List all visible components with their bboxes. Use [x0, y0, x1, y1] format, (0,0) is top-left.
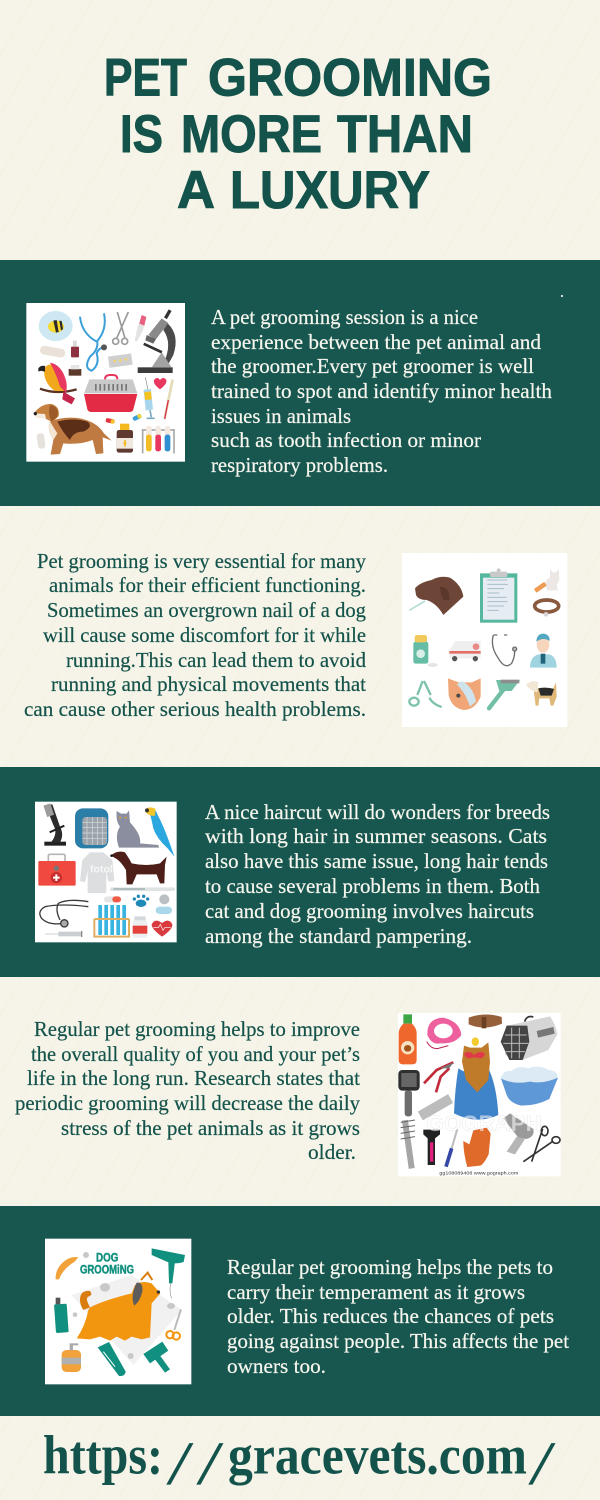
text: efficient functioning: will cause some discomfort for it while [43, 623, 366, 647]
panel: haircuts [0, 767, 600, 977]
text: efficient functioning: can cause other serious health problems. [24, 697, 366, 721]
icon: scissors [113, 312, 128, 344]
text: haircuts: among the standard pampering. [205, 924, 472, 948]
text: haircuts [205, 800, 550, 948]
icon: bandage [39, 345, 66, 358]
icon: syringe [45, 931, 82, 937]
panel: quality of life [15, 1013, 561, 1176]
text: quality of life: periodic grooming will decrease the daily [15, 1091, 360, 1115]
icon: dog with thermometer [409, 577, 463, 615]
text: quality of life: Regular pet grooming helps to improve [34, 1017, 360, 1041]
icon: heart with pulse [152, 921, 172, 937]
text: quality of life: life in the long run. Research states that [27, 1066, 360, 1090]
icon: grey carrier [501, 1016, 557, 1060]
title: GROOMING [208, 48, 492, 108]
text: health checks: trained to spot and identify minor health [211, 379, 552, 403]
text: haircuts: to cause several problems in them. Both [205, 874, 540, 898]
icon: teal hair dryer [152, 1248, 185, 1298]
icon: foam basin [501, 1067, 558, 1106]
icon: spray bottle [54, 1298, 69, 1333]
text: health checks: A pet grooming session is a nice [211, 305, 478, 329]
icon: orange long-haired dog [77, 1273, 160, 1341]
website url: / [525, 1429, 560, 1498]
icon: dachshund [110, 852, 167, 884]
text: image credit: gg108089408 www.gograph.com [439, 1170, 518, 1175]
website url: gracevets.com [228, 1424, 527, 1486]
icon: retractable leash [427, 1018, 461, 1049]
text: haircuts: A nice haircut will do wonders for breeds [205, 800, 550, 824]
title: LUXURY [230, 161, 430, 220]
text: dog grooming heading [80, 1250, 134, 1277]
text: temperament: Regular pet grooming helps the pets to [227, 1255, 553, 1279]
icon: bandaged cat [448, 678, 481, 710]
text: quality of life: the overall quality of you and your pet’s [31, 1042, 360, 1066]
text: haircuts: also have this same issue, long hair tends [205, 849, 548, 873]
text: haircuts: with long hair in summer seasons. Cats [205, 824, 547, 848]
icon: grey cat [116, 810, 159, 848]
title [104, 48, 492, 220]
icon: pump bottle [62, 1343, 81, 1372]
text: fotolia watermark: fotolia [90, 864, 122, 875]
text: temperament: going against people. This affects the pet [227, 1329, 569, 1353]
icon: round pill and capsule [156, 894, 172, 914]
image: grooming tools collage [398, 1013, 561, 1176]
text: efficient functioning: animals for their efficient functioning. [49, 573, 366, 597]
icon: orange grooming glove [463, 1128, 491, 1167]
icon: thermometer [110, 887, 175, 891]
panel: temperament [0, 1206, 600, 1416]
icon: test tubes [94, 905, 129, 937]
icon: dropper [135, 315, 146, 342]
icon: stethoscope [80, 313, 106, 371]
website url [43, 1424, 560, 1498]
icon: small bandage [36, 433, 46, 449]
icon: syringe [144, 377, 155, 418]
icon: microscope [138, 309, 176, 373]
icon: blue handled tool [446, 1129, 457, 1167]
icon: wrapped yorkshire terrier [454, 1037, 498, 1120]
icon: hair dryer [503, 1113, 534, 1154]
text: efficient functioning: running and physical movements that [51, 672, 366, 696]
icon: beagle [526, 681, 557, 706]
icon: flea comb [418, 1094, 453, 1120]
icon: paw print [133, 895, 149, 907]
icon: nail clippers [424, 1062, 453, 1092]
text: efficient functioning: Pet grooming is very essential for many [37, 549, 366, 573]
icon: nail clippers [409, 681, 442, 707]
text: dog grooming heading: GROOMiNG [80, 1263, 134, 1277]
text: temperament [227, 1255, 569, 1378]
icon: pin brush [401, 1120, 415, 1169]
title: THAN [337, 105, 473, 164]
title: PET [104, 48, 187, 108]
icon: stethoscope [40, 900, 88, 927]
icon: medicine jar [413, 635, 438, 667]
icon: dematting rake [423, 1130, 440, 1165]
icon: comb [56, 1257, 78, 1279]
image: dog grooming illustration [45, 1239, 191, 1384]
icon: shampoo bottle [399, 1014, 417, 1064]
text: health checks [211, 305, 552, 477]
image: pet health icons [402, 553, 567, 727]
text: temperament: older. This reduces the chances of pets [227, 1304, 554, 1328]
title: MORE [181, 105, 322, 164]
text: efficient functioning: Sometimes an overgrown nail of a dog [47, 598, 366, 622]
icon: leather collar [469, 1014, 502, 1028]
icon: microscope [43, 803, 66, 846]
icon: orange scissors [166, 1309, 181, 1340]
text: health checks: experience between the pet animal and [211, 330, 542, 354]
icon: cat with tag [534, 569, 559, 593]
icon: red medical case [38, 854, 76, 886]
image: veterinary supplies collage [26, 303, 185, 462]
icon: medicine bottle [71, 341, 79, 357]
website url: / [163, 1429, 198, 1498]
text: health checks: respiratory problems. [211, 453, 388, 477]
text: efficient functioning: running.This can lead them to avoid [66, 648, 366, 672]
website url: / [193, 1429, 228, 1498]
icon: collar [535, 600, 559, 617]
icon: test tubes [142, 426, 175, 453]
text: quality of life [15, 1017, 360, 1164]
icon: pill bottle [133, 916, 147, 938]
text: quality of life: older. [308, 1140, 356, 1164]
icon: ambulance [449, 641, 481, 661]
icon: veterinarian [530, 634, 557, 668]
text: health checks: issues in animals [211, 404, 351, 428]
icon: pill blister [108, 353, 133, 368]
icon: clipper [98, 1342, 126, 1376]
icon: blue carrier [75, 808, 108, 848]
text: quality of life: stress of the pet animals as it grows [61, 1116, 360, 1140]
icon: grey stethoscope [492, 635, 517, 666]
icon: slicker brush [398, 1070, 420, 1116]
icon: beagle dog [34, 404, 112, 455]
text: dog grooming heading: DOG [96, 1250, 118, 1264]
text: temperament: owners too. [227, 1354, 326, 1378]
text: efficient functioning [24, 549, 366, 721]
icon: syrup bottle [117, 424, 133, 453]
icon: jar [69, 365, 81, 376]
icon: thermometer [165, 379, 173, 419]
icon: paw prints [73, 1252, 175, 1359]
icon: slicker brush [489, 680, 520, 708]
image: vet tools with cat and dog [35, 802, 177, 942]
panel: health checks [0, 260, 600, 506]
text: health checks: the groomer.Every pet groomer is well [211, 354, 534, 378]
icon: heart [154, 378, 166, 389]
icon: macaw [145, 807, 174, 857]
icon: teal brush [143, 1342, 170, 1373]
panel: efficient functioning [24, 549, 567, 727]
text: haircuts: cat and dog grooming involves haircuts [205, 899, 534, 923]
website url: https: [43, 1424, 163, 1486]
icon: parrot [38, 363, 77, 404]
icon: clipboard [480, 568, 517, 623]
text: gograph watermark: GOGRAPH [427, 1111, 542, 1136]
title: A [177, 161, 215, 220]
icon: capsules [105, 413, 142, 424]
icon: fish bowl [39, 311, 73, 341]
icon: lab coat [80, 852, 114, 893]
icon: capsule [104, 896, 121, 902]
text: temperament: carry their temperament as it grows [227, 1280, 525, 1304]
icon: grooming scissors [523, 1126, 560, 1162]
title: IS [120, 105, 163, 164]
text: health checks: such as tooth infection or minor [211, 428, 481, 452]
icon: red pet carrier [84, 375, 137, 412]
